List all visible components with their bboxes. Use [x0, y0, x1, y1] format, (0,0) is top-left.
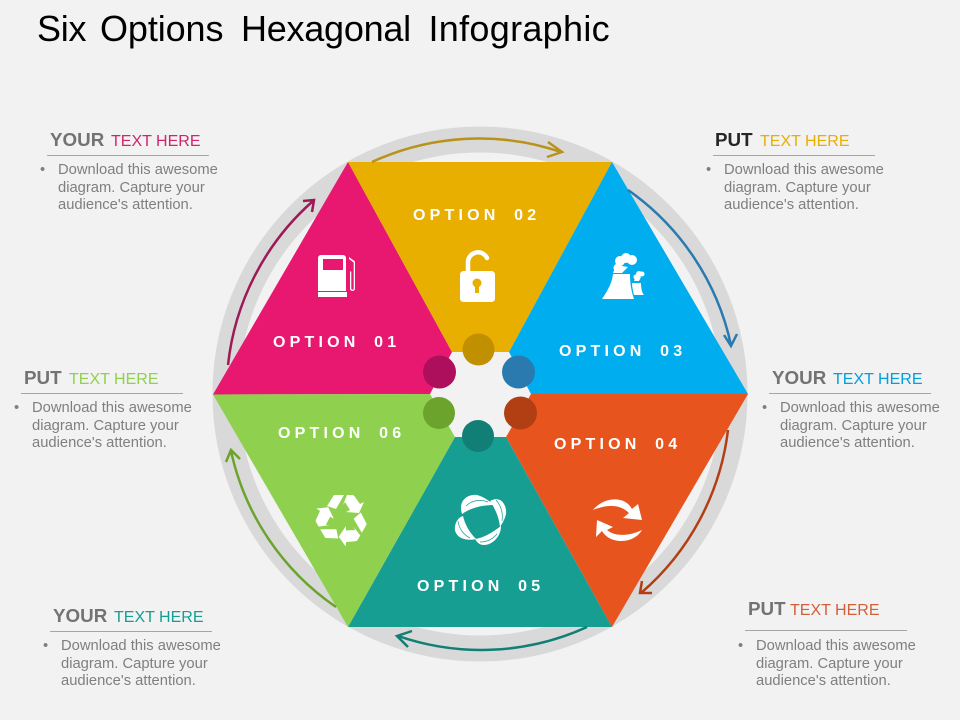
text block: bottom right: • [738, 638, 743, 654]
text block: bottom right: audience's attention. [756, 673, 891, 689]
text block: middle right [762, 367, 940, 451]
icon: leaf ring [455, 495, 506, 545]
title: Options [100, 8, 223, 49]
text block: bottom left: TEXT HERE [114, 609, 204, 626]
text block: middle left: audience's attention. [32, 435, 167, 451]
text block: middle right: YOUR [772, 367, 827, 388]
arrow: orange [640, 430, 728, 593]
title: Infographic [428, 8, 610, 49]
label: option 06: OPTION 06 [278, 425, 405, 442]
panel: option 06 [213, 394, 455, 627]
text block: bottom right: PUT [748, 598, 786, 619]
label: option 03: OPTION 03 [559, 343, 686, 360]
text block: top right: Download this awesome [724, 162, 884, 178]
text block: top right [706, 129, 884, 213]
text block: top right: • [706, 162, 711, 178]
text block: middle right: TEXT HERE [833, 371, 922, 388]
text block: top right: TEXT HERE [760, 133, 850, 150]
panel: option 03 [509, 162, 748, 394]
panel: option 04 [506, 394, 748, 627]
arrow: yellow [372, 138, 562, 162]
grey ring [226, 140, 734, 648]
panel: option 02 [348, 162, 612, 352]
icon: recycle [310, 495, 370, 550]
text block: top left: YOUR [50, 129, 105, 150]
text block: top right: audience's attention. [724, 197, 859, 213]
text block: bottom left: diagram. Capture your [61, 656, 208, 672]
icon: factory cooling towers [602, 253, 644, 299]
title: Six [37, 8, 87, 49]
text block: middle left: diagram. Capture your [32, 418, 179, 434]
icon: refresh arrows [593, 499, 642, 541]
text block: middle right: • [762, 400, 767, 416]
text block: middle left: • [14, 400, 19, 416]
text block: bottom right: TEXT HERE [790, 602, 880, 619]
text block: top left: TEXT HERE [111, 133, 200, 150]
label: option 05: OPTION 05 [417, 578, 544, 595]
text block: top left: audience's attention. [58, 197, 193, 213]
icon: fuel pump [318, 255, 355, 297]
text block: middle left: PUT [24, 367, 62, 388]
text block: bottom left: YOUR [53, 605, 108, 626]
text block: bottom left: Download this awesome [61, 638, 221, 654]
text block: middle left [14, 367, 192, 451]
panel: option 05 [348, 437, 612, 627]
text block: top left: • [40, 162, 45, 178]
text block: middle right: diagram. Capture your [780, 418, 927, 434]
title: Hexagonal [241, 8, 411, 49]
label: option 04: OPTION 04 [554, 436, 681, 453]
text block: bottom left: • [43, 638, 48, 654]
label: option 01: OPTION 01 [273, 334, 400, 351]
text block: top right: diagram. Capture your [724, 180, 871, 196]
text block: top right: PUT [715, 129, 753, 150]
text block: bottom right [738, 598, 916, 689]
text block: middle right: Download this awesome [780, 400, 940, 416]
text block: middle left: TEXT HERE [69, 371, 158, 388]
text block: top left [40, 129, 218, 213]
text block: middle right: audience's attention. [780, 435, 915, 451]
arrow: green [226, 450, 336, 607]
text block: top left: diagram. Capture your [58, 180, 205, 196]
icon: open padlock [460, 252, 495, 302]
text block: top left: Download this awesome [58, 162, 218, 178]
text block: bottom left: audience's attention. [61, 673, 196, 689]
arrow: teal [397, 627, 587, 650]
text block: bottom right: diagram. Capture your [756, 656, 903, 672]
text block: bottom left [43, 605, 221, 689]
hexagon diagram [213, 162, 748, 627]
center connector dots [423, 334, 537, 452]
panel: option 01 [213, 162, 452, 394]
arrow: blue [628, 190, 737, 346]
label: option 02: OPTION 02 [413, 207, 540, 224]
text block: middle left: Download this awesome [32, 400, 192, 416]
text block: bottom right: Download this awesome [756, 638, 916, 654]
arrow: pink [228, 200, 314, 365]
